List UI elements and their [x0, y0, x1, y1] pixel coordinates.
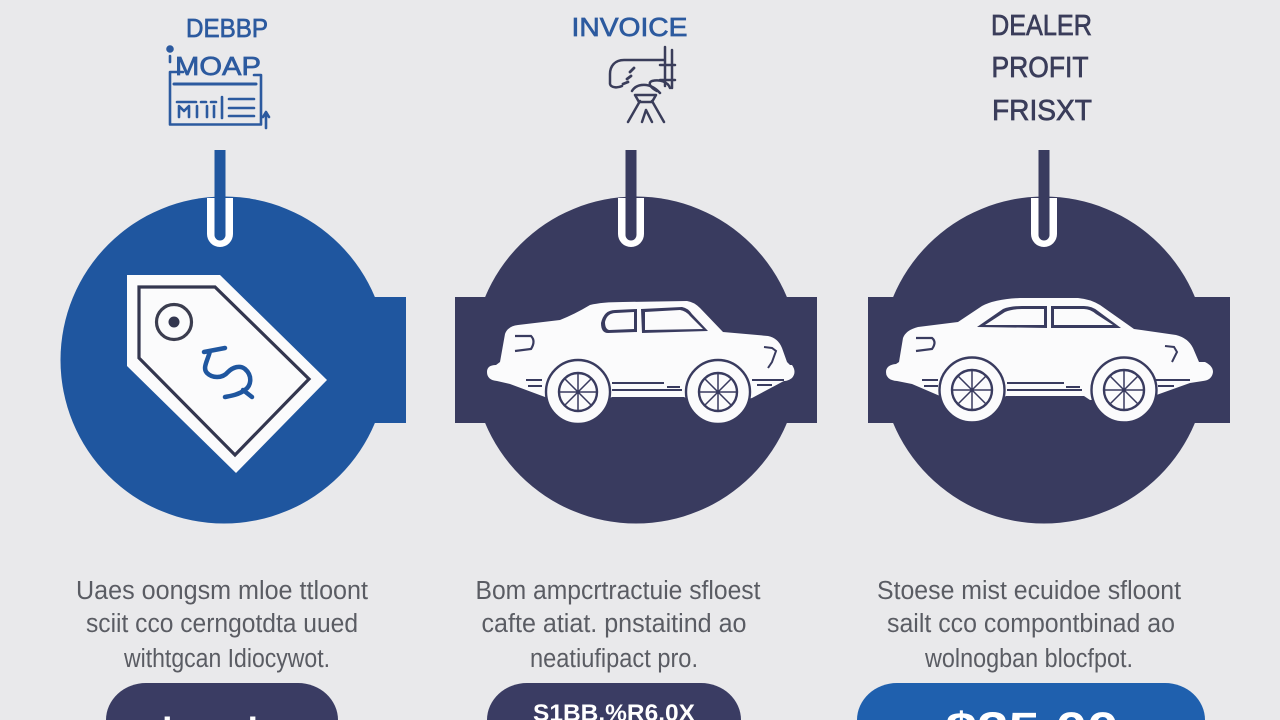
heading: column one: MOAP — [175, 51, 261, 81]
heading: invoice: INVOICE — [572, 12, 688, 42]
heading: dealer profit: PROFIT — [992, 52, 1089, 84]
text block: dealer profit description: Stoese mist ecuidoe sfloont — [877, 577, 1181, 605]
text block: column one description: sciit cco cerngotdta uued — [86, 610, 358, 638]
text block: invoice description: Bom ampcrtractuie sfloest — [476, 577, 760, 605]
heading: column one: DEBBP — [186, 13, 268, 43]
text block: invoice description: neatiufipact pro. — [530, 645, 698, 673]
heading: dealer profit: FRISXT — [992, 95, 1092, 127]
pin connector — [618, 150, 644, 247]
heading: dealer profit: DEALER — [991, 10, 1092, 42]
text block: column one description: withtgcan Idiocywot. — [123, 645, 330, 673]
text block: dealer profit description — [877, 577, 1181, 673]
text block: dealer profit description: sailt cco compontbinad ao — [887, 610, 1175, 638]
text block: column one description: Uaes oongsm mloe ttloont — [76, 577, 368, 605]
text block: dealer profit description: wolnogban blocfpot. — [924, 645, 1133, 673]
icon: car — [487, 301, 794, 424]
heading: dealer profit — [991, 10, 1092, 127]
icon: invoice stand — [610, 47, 675, 122]
panel: Dealer profit column — [857, 10, 1230, 720]
heading: column one — [175, 13, 268, 81]
pill: invoice value — [487, 683, 741, 720]
pin connector — [1031, 150, 1057, 247]
icon: price tag — [127, 275, 327, 473]
circle with tabs — [868, 196, 1230, 524]
circle with tabs — [455, 196, 817, 524]
icon: car — [886, 298, 1213, 422]
text block: invoice description — [476, 577, 760, 673]
panel: MSRP column — [60, 13, 406, 720]
pill: dealer profit value — [857, 683, 1205, 720]
icon: price sheet — [168, 46, 269, 128]
text block: invoice description: cafte atiat. pnstaitind ao — [482, 610, 746, 638]
panel: Invoice column — [455, 12, 817, 720]
pin connector — [207, 150, 233, 247]
pill: column one value — [106, 683, 338, 720]
text block: column one description — [76, 577, 368, 673]
circle with tab — [60, 196, 406, 524]
